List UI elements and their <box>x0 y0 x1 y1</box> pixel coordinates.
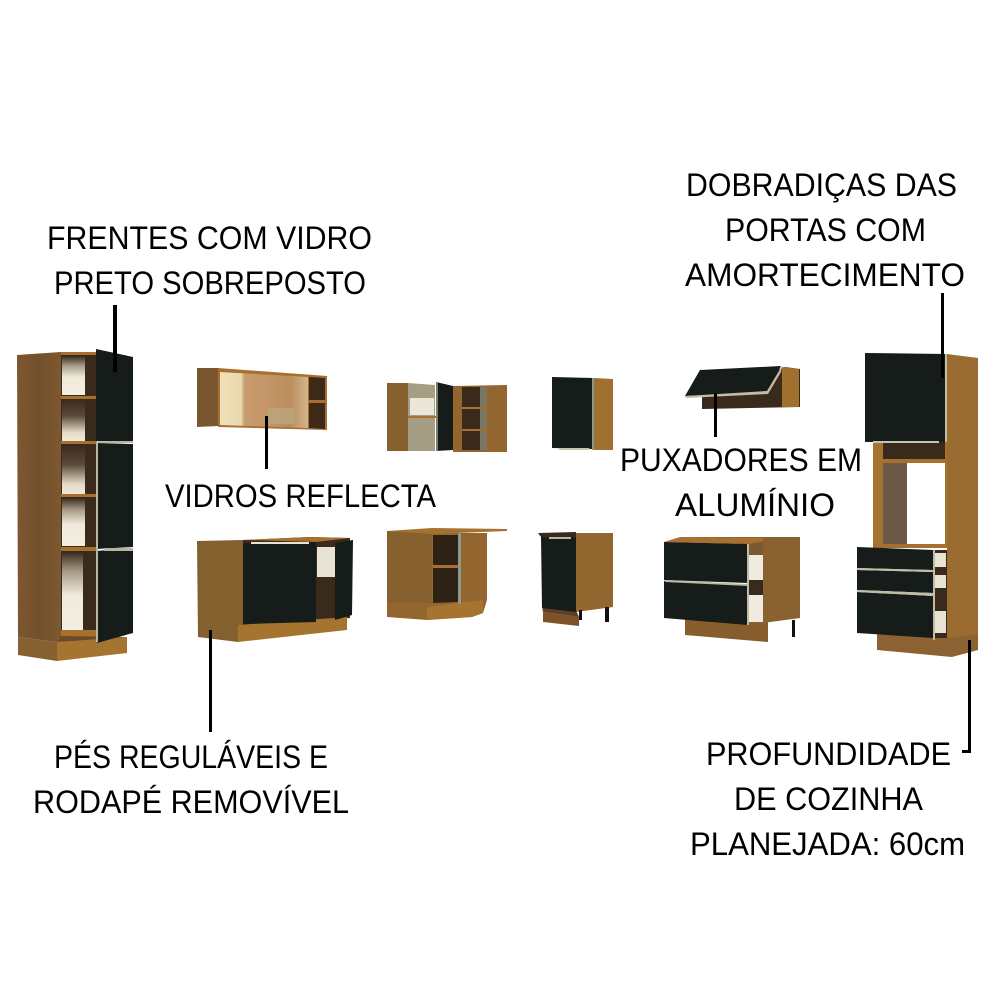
label: profundidade: PROFUNDIDADE <box>706 736 951 772</box>
cabinet: tall pantry with glass doors <box>17 349 133 661</box>
label: pes regulaveis: RODAPÉ REMOVÍVEL <box>33 784 349 820</box>
label: profundidade: DE COZINHA <box>734 781 924 817</box>
cabinet: sink base with two doors <box>197 537 353 642</box>
label: puxadores: ALUMÍNIO <box>675 487 835 523</box>
label: profundidade <box>690 736 965 862</box>
leader line: dobradicas <box>941 293 944 378</box>
label: puxadores <box>620 442 862 523</box>
label: frentes com vidro <box>47 220 372 301</box>
cabinet: wall unit with reflective glass <box>197 368 327 430</box>
leader line: profundidade <box>962 640 970 752</box>
label: frentes com vidro: PRETO SOBREPOSTO <box>54 265 366 301</box>
cabinet: wall single door <box>552 377 613 450</box>
label: dobradicas: DOBRADIÇAS DAS <box>686 167 957 203</box>
label: pes regulaveis: PÉS REGULÁVEIS E <box>54 739 328 775</box>
cabinet: base single door <box>538 532 613 626</box>
label: frentes com vidro: FRENTES COM VIDRO <box>47 220 372 256</box>
cabinet: base with two drawers <box>664 537 800 642</box>
cabinet: tall oven tower <box>857 353 978 657</box>
leader line: vidros <box>265 416 268 469</box>
label: pes regulaveis <box>33 739 349 820</box>
cabinet: wall lift-up door <box>685 366 800 409</box>
leader line: frentes <box>113 305 117 372</box>
label: puxadores: PUXADORES EM <box>620 442 862 478</box>
leader line: pes <box>209 630 212 732</box>
cabinet: wall corner unit <box>387 382 507 452</box>
label: dobradicas <box>685 167 965 293</box>
label: vidros reflecta: VIDROS REFLECTA <box>165 478 437 514</box>
label: dobradicas: AMORTECIMENTO <box>685 257 965 293</box>
label: profundidade: PLANEJADA: 60cm <box>690 826 965 862</box>
cabinet: base corner unit <box>387 528 507 620</box>
leader line: puxadores <box>714 393 717 437</box>
label: dobradicas: PORTAS COM <box>725 212 926 248</box>
